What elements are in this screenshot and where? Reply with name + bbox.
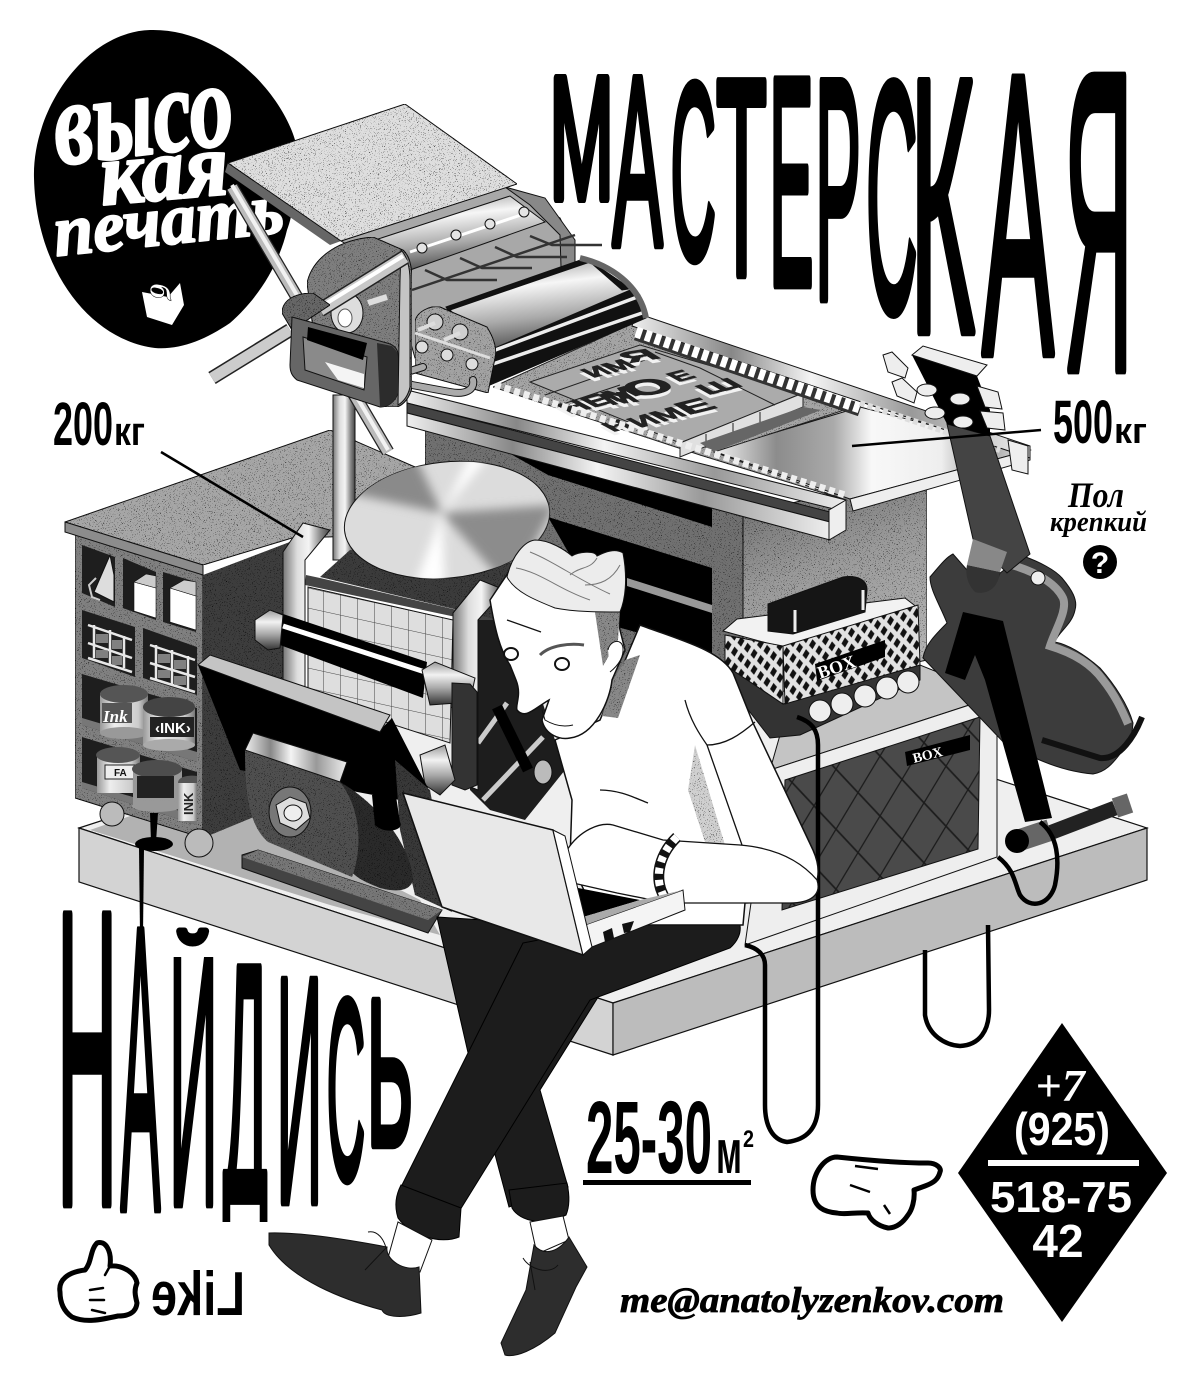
cam wheel (245, 733, 413, 890)
plate bar (415, 333, 490, 358)
table right face (743, 470, 927, 700)
knobs (809, 671, 919, 722)
phone rhombus: +7 (1035, 1060, 1087, 1111)
label 500кг: 500 (1053, 388, 1113, 456)
headstock (912, 346, 990, 436)
hex nut (269, 787, 311, 837)
phone rhombus: 42 (1032, 1215, 1084, 1267)
disc wedges (355, 462, 550, 579)
end plate (307, 237, 412, 407)
neck joint (967, 539, 1007, 572)
front sock (386, 1222, 432, 1272)
front cuff (396, 1185, 461, 1240)
brow (540, 644, 584, 655)
cam base plate (242, 850, 442, 933)
amp handle (768, 577, 867, 634)
man (269, 540, 818, 1356)
large press table (425, 400, 927, 700)
movable type: Н (595, 417, 638, 435)
roller cap right (422, 662, 475, 705)
cam notch (372, 790, 401, 831)
phone rhombus: (925) (1014, 1103, 1110, 1155)
ink can: INK small (178, 776, 197, 821)
amp face (745, 696, 997, 945)
front laces (365, 1232, 386, 1270)
ink can: dark (132, 760, 182, 812)
collar shadow (602, 655, 640, 718)
metal stud (534, 760, 552, 784)
ink can: INK: ‹INK› (155, 720, 191, 737)
laptop base (585, 890, 685, 947)
phone rhombus (958, 1023, 1167, 1322)
right pillar (453, 580, 505, 790)
laptop deck (583, 890, 683, 925)
guitar body (923, 554, 1133, 774)
inking rollers (403, 258, 646, 393)
email: me@anatolyzenkov.com (620, 1280, 1004, 1320)
title: МАСТЕРСКАЯ: С (670, 32, 716, 311)
small amp (723, 577, 920, 738)
leader 200кг (161, 452, 303, 537)
stand foot front (1005, 829, 1050, 853)
movable type: НЕМ (550, 384, 648, 417)
plate screws (416, 341, 478, 370)
movable type: О (610, 372, 685, 402)
head right grille (783, 605, 920, 704)
badge logo: б (143, 282, 177, 301)
top bar (305, 575, 500, 620)
cross lever (212, 256, 405, 378)
roller highlight (283, 626, 425, 672)
head left grille (725, 635, 783, 704)
leader 500кг (852, 430, 1041, 446)
bolt (331, 293, 387, 333)
amp top (770, 665, 997, 770)
rear leg (437, 917, 640, 1207)
title: НАЙДИСЬ: С (327, 948, 365, 1233)
clamp frame (282, 293, 398, 407)
head base (725, 665, 920, 738)
area label: 25-30 (586, 1080, 712, 1195)
long lever (232, 185, 388, 452)
forearm (567, 824, 818, 903)
ink can: FA: FA (114, 768, 127, 779)
disc base (320, 550, 540, 620)
amp label (905, 735, 970, 767)
rear cuff (509, 1183, 569, 1221)
front rail (407, 385, 846, 540)
left pillar (283, 523, 330, 690)
eyes (504, 648, 569, 670)
cabinet front (75, 530, 203, 838)
amp grille (782, 717, 980, 910)
ink can: Ink: Ink (102, 707, 128, 726)
badge logo (142, 282, 184, 325)
neck heel (966, 565, 1000, 593)
mouth (542, 710, 573, 726)
movable type: М (591, 388, 646, 408)
handle brackets (795, 590, 863, 632)
drum rivets (417, 207, 529, 253)
gripper wires (412, 235, 602, 290)
title: НАЙДИСЬ (57, 825, 413, 1295)
type forme (530, 345, 803, 443)
roller cap left (255, 610, 283, 650)
type lines (545, 352, 775, 405)
plate handle (403, 367, 473, 393)
ink can: INK small: INK (181, 792, 196, 815)
lower roller (420, 745, 455, 795)
movable type: Ш (688, 375, 749, 398)
badge lettering: высокая печать: печать (49, 168, 287, 272)
feed drum (341, 187, 602, 358)
funnel (89, 555, 114, 602)
title: НАЙДИСЬ: Ь (367, 957, 413, 1189)
cabinet (65, 430, 560, 857)
question badge: ? (1091, 547, 1109, 580)
title: МАСТЕРСКАЯ: Е (769, 15, 814, 348)
guitar stand (945, 612, 1052, 822)
cabinet top (65, 430, 560, 565)
title: МАСТЕРСКАЯ: Р (815, 15, 861, 366)
forme front cells (680, 393, 803, 457)
guitar neck (947, 424, 1030, 573)
movable type: Е (660, 367, 702, 385)
title: МАСТЕРСКАЯ: Т (716, 21, 767, 334)
movable type: ИМ (574, 357, 642, 380)
front thigh and shin (401, 905, 740, 1210)
laptop lid (403, 793, 592, 955)
shaved side (595, 610, 620, 666)
rear shoe (501, 1237, 587, 1356)
shelf floors (82, 718, 197, 825)
shirt fold shadow (688, 745, 725, 845)
arm (452, 683, 477, 790)
side plate (415, 307, 496, 393)
stand rest (1042, 717, 1142, 758)
glass jars left (88, 625, 195, 692)
question badge (1083, 545, 1117, 580)
note: пол крепкий (1050, 475, 1147, 538)
title: МАСТЕРСКАЯ: С (866, 15, 918, 381)
title: МАСТЕРСКАЯ: М (549, 41, 614, 236)
thumb up (60, 1242, 137, 1320)
label 200кг: 200 (53, 390, 113, 458)
rear sock (530, 1216, 569, 1254)
hair (507, 540, 626, 612)
jar fills (96, 634, 186, 685)
big amp (745, 665, 997, 945)
area label: 2 (743, 1126, 754, 1153)
table left face (425, 400, 743, 700)
title: МАСТЕРСКАЯ (549, 0, 1133, 461)
metal sheet bed (713, 407, 1030, 511)
head label: BOX (815, 651, 858, 683)
hair strands (516, 552, 620, 600)
stand foot rear (1047, 803, 1130, 834)
cross bars (478, 703, 543, 800)
movable type: Я (610, 346, 667, 366)
forehead crease (507, 620, 541, 632)
rack teeth rail (632, 313, 1030, 458)
ink can: Ink (100, 685, 148, 739)
ink can: INK (143, 697, 195, 751)
cables (745, 717, 1057, 1142)
note: пол крепкий: крепкий (1050, 506, 1147, 538)
dark housing behind cam (395, 760, 452, 912)
laptop keyboard (573, 887, 640, 917)
black egg badge (34, 30, 295, 348)
badge lettering: высокая печать (45, 38, 287, 272)
plate bearings (427, 314, 468, 340)
floor slab (79, 655, 1147, 1055)
guitar (883, 346, 1142, 853)
pickup dot (1031, 571, 1045, 585)
laptop ports (603, 921, 634, 942)
small press (255, 445, 565, 820)
title: МАСТЕРСКАЯ: А (982, 0, 1055, 440)
movable type: ИМ (621, 405, 694, 431)
front shoe (269, 1233, 421, 1316)
head label (815, 640, 885, 683)
label 500кг: кг (1114, 410, 1147, 451)
movable type: Е (667, 394, 724, 418)
mirrored like: Like (151, 1260, 245, 1329)
pointing hand (813, 1157, 940, 1228)
rear laces (523, 1258, 558, 1290)
press board (225, 104, 517, 245)
movable type (550, 346, 749, 435)
ear (608, 641, 623, 672)
cabinet top edge (65, 522, 203, 575)
black band (497, 707, 528, 770)
face (490, 570, 625, 738)
gap shadow (700, 407, 821, 452)
type bed (493, 322, 860, 500)
area label: м (716, 1118, 742, 1187)
ink drip (135, 813, 173, 935)
disc (339, 452, 555, 588)
area label (583, 1080, 754, 1195)
head top (723, 598, 918, 648)
upper roller (277, 612, 427, 698)
title: НАЙДИСЬ: Н (57, 825, 117, 1294)
plate shafts (418, 323, 460, 340)
label 200кг: кг (114, 410, 145, 454)
slot stripe (627, 578, 712, 613)
ink can: FA (96, 747, 140, 793)
sleeve line (685, 700, 755, 845)
title: НАЙДИСЬ: И (276, 912, 322, 1271)
badge lettering: высокая печать: кая (95, 114, 232, 225)
cabinet side (203, 540, 295, 838)
chest crease (600, 790, 648, 803)
title: МАСТЕРСКАЯ: А (612, 26, 663, 296)
shelf cells (82, 545, 197, 825)
badge lettering: высокая печать: высо (45, 38, 240, 191)
guitar highlights (1012, 565, 1128, 724)
shirt (555, 625, 818, 925)
phone rhombus: 518-75 (990, 1173, 1132, 1222)
dark back panel (470, 590, 565, 820)
floor shadows (90, 790, 440, 935)
table slots (468, 430, 712, 653)
title: НАЙДИСЬ: Д (223, 896, 268, 1272)
title: НАЙДИСЬ: А (120, 845, 161, 1295)
casters (100, 802, 213, 857)
grid panel (308, 587, 453, 743)
title: МАСТЕРСКАЯ: К (910, 3, 975, 409)
title: НАЙДИСЬ: ˘ (179, 918, 208, 1007)
title: НАЙДИСЬ: Й (169, 881, 218, 1280)
bracelet (659, 837, 677, 907)
tilted tray (198, 655, 428, 820)
note: пол крепкий: Пол (1067, 475, 1124, 515)
tuning pegs (883, 352, 1005, 430)
rear rail end (1008, 440, 1028, 474)
amp label: BOX (911, 745, 944, 767)
support rod (333, 395, 355, 560)
white boxes (134, 574, 196, 630)
